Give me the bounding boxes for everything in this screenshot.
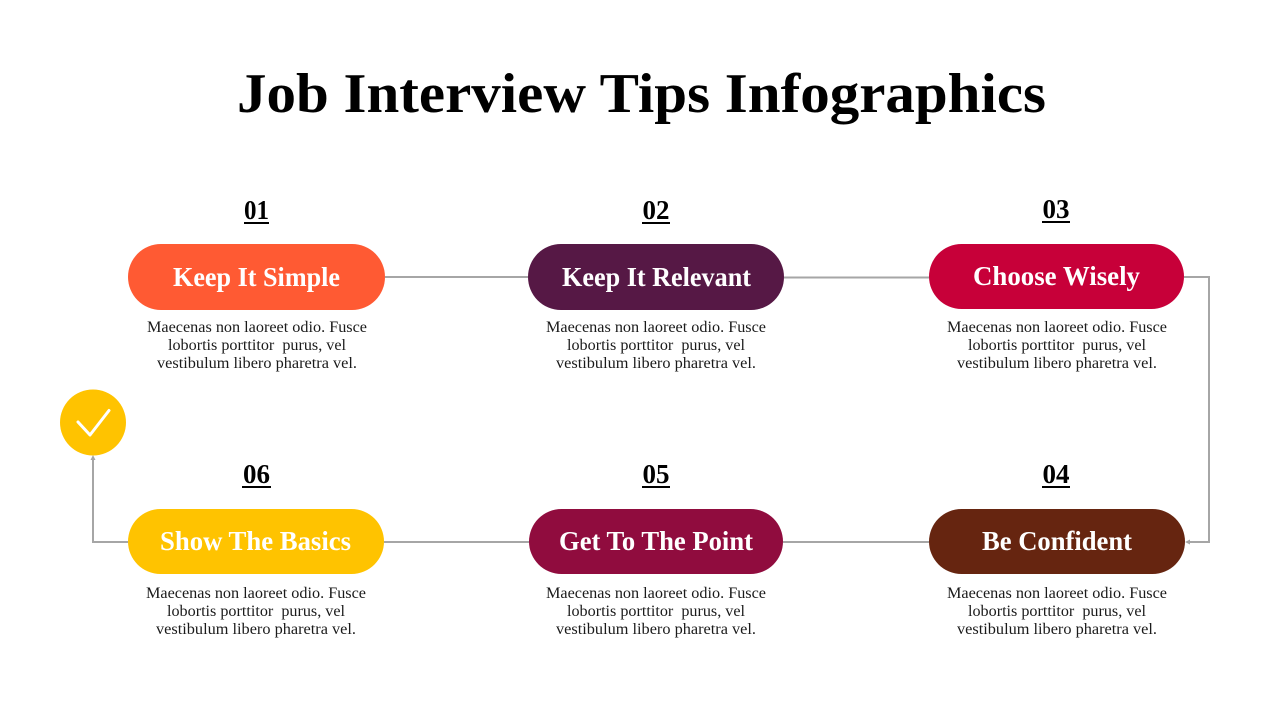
icon: yellow check circle — [60, 390, 126, 456]
connector: step 04 to 05 — [783, 541, 929, 543]
pill: Show The Basics: Show The Basics — [160, 526, 351, 556]
description 05: vestibulum libero pharetra vel. — [556, 621, 756, 638]
description 06: lobortis porttitor purus, vel — [167, 603, 345, 620]
description 01 — [147, 319, 367, 372]
description 04 — [947, 585, 1167, 638]
number 06: 06 — [243, 459, 270, 489]
pill: Get To The Point: Get To The Point — [559, 526, 753, 556]
pill: Choose Wisely — [929, 244, 1184, 309]
step 04 — [929, 459, 1185, 638]
description 06 — [146, 585, 366, 638]
pill: Keep It Simple — [128, 244, 385, 310]
number 03: 03 — [1042, 194, 1070, 224]
pill: Choose Wisely: Choose Wisely — [973, 261, 1140, 291]
pill: Keep It Simple: Keep It Simple — [173, 262, 340, 292]
description 02 — [546, 319, 766, 372]
description 06: Maecenas non laoreet odio. Fusce — [146, 585, 366, 602]
description 03 — [947, 319, 1167, 372]
description 06: vestibulum libero pharetra vel. — [156, 621, 356, 638]
description 05: Maecenas non laoreet odio. Fusce — [546, 585, 766, 602]
pill: Get To The Point — [529, 509, 783, 574]
description 01: vestibulum libero pharetra vel. — [157, 355, 357, 372]
description 02: lobortis porttitor purus, vel — [567, 337, 745, 354]
number 02: 02 — [642, 195, 670, 225]
description 04: lobortis porttitor purus, vel — [968, 603, 1146, 620]
number 01: 01 — [244, 195, 269, 225]
pill: Be Confident — [929, 509, 1185, 574]
step 01 — [128, 195, 385, 372]
pill: Be Confident: Be Confident — [982, 526, 1132, 556]
pill: Show The Basics — [128, 509, 384, 574]
description 03: vestibulum libero pharetra vel. — [957, 355, 1157, 372]
title: Job Interview Tips Infographics — [237, 63, 1046, 125]
description 01: Maecenas non laoreet odio. Fusce — [147, 319, 367, 336]
step 03 — [929, 194, 1184, 372]
arrow: step 06 to check icon — [90, 455, 128, 542]
description 04: vestibulum libero pharetra vel. — [957, 621, 1157, 638]
connector: step 01 to 02 — [385, 276, 528, 278]
step 05 — [529, 459, 783, 638]
description 02: Maecenas non laoreet odio. Fusce — [546, 319, 766, 336]
pill: Keep It Relevant — [528, 244, 784, 310]
pill: Keep It Relevant: Keep It Relevant — [562, 262, 751, 292]
description 03: lobortis porttitor purus, vel — [968, 337, 1146, 354]
connector: step 05 to 06 — [384, 541, 529, 543]
number 04: 04 — [1042, 459, 1070, 489]
description 02: vestibulum libero pharetra vel. — [556, 355, 756, 372]
description 05: lobortis porttitor purus, vel — [567, 603, 745, 620]
description 04: Maecenas non laoreet odio. Fusce — [947, 585, 1167, 602]
description 01: lobortis porttitor purus, vel — [168, 337, 346, 354]
arrow: step 03 to 04 — [1184, 277, 1209, 544]
step 06 — [128, 459, 384, 638]
connector: step 02 to 03 — [784, 276, 929, 278]
description 05 — [546, 585, 766, 638]
description 03: Maecenas non laoreet odio. Fusce — [947, 319, 1167, 336]
step 02 — [528, 195, 784, 372]
number 05: 05 — [642, 459, 670, 489]
